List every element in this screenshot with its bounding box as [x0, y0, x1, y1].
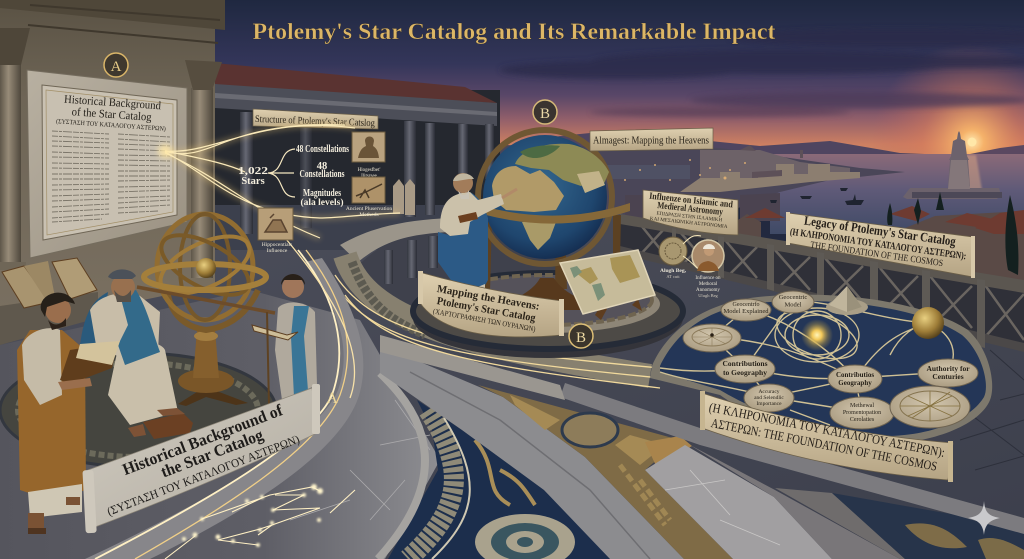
card: bust: Ilitsrsee — [361, 174, 378, 179]
medallion B bottom — [569, 324, 593, 348]
banner: mapping the heavens — [418, 271, 564, 337]
node: geocentric model explained: Model Explained — [724, 308, 769, 315]
label: A on floor: A — [326, 390, 338, 407]
node: authority for centuries: Authority for — [926, 364, 970, 373]
diagram: 1,022 stars tree: 1,022 — [238, 166, 268, 177]
diagram: 1,022 stars tree: Magnitudes — [303, 188, 341, 199]
banner: influence on islamic and medieval astronomy: ΚΑΙ ΜΕΣΑΙΩΝΙΚΗ ΑΣΤΡΟΝΟΜΙΑ — [650, 217, 728, 230]
glowing light streams from the plaque — [158, 125, 400, 238]
banner: influence on islamic and medieval astronomy: ΕΠΙΔΡΑΣΗ ΣΤΗΝ ΙΣΛΑΜΙΚΗ — [656, 212, 723, 223]
left curved curb with gold lines — [85, 232, 363, 559]
medallions: astrolabe and Ulugh Beg: Influence on — [695, 276, 721, 281]
node: contributions geography — [828, 365, 882, 393]
gold road bundle toward the legacy disc — [335, 255, 660, 388]
diagram: 1,022 stars tree: Constellations — [300, 169, 344, 180]
medallions: astrolabe and Ulugh Beg: AT cutt — [666, 274, 680, 279]
node: contributions geography: Contributios — [836, 371, 874, 379]
title: Ptolemy's Star Catalog and Its Remarkable Impact — [252, 19, 776, 44]
banner: greek legacy scroll: ΑΣΤΕΡΩΝ: THE FOUNDATION OF THE COSMOS — [710, 415, 938, 474]
floor marble plaza, bottom centre-left — [0, 290, 440, 559]
banner: influence on islamic and medieval astronomy: Medieral Astronomy — [657, 201, 724, 218]
medallions: astrolabe and Ulugh Beg — [659, 235, 724, 298]
banner: historical background scroll: Historical Background of — [120, 400, 286, 479]
background: dusk sky — [0, 0, 1024, 242]
medallion A: A — [111, 59, 122, 75]
astrolabe disc — [890, 386, 970, 428]
marble step band — [380, 345, 684, 559]
banner: greek legacy scroll — [700, 391, 953, 482]
rug mosaic around the figures — [0, 353, 276, 467]
node: accuracy and scientific importance: Importance — [756, 401, 782, 407]
banner: mapping the heavens: Ptolemy's Star Catalog — [436, 295, 537, 324]
lighthouse of Alexandria — [903, 131, 1002, 199]
globe on stand — [478, 130, 630, 310]
plaque heading: Historical Background — [64, 94, 162, 112]
panel: historical background plaque — [27, 70, 187, 258]
banner: structure of the star catalog: Structure of Ptolemy's Star Catslog — [255, 114, 375, 129]
diagram: 1,022 stars tree: Stars — [241, 176, 265, 187]
node: contributions to geography: Contributions — [722, 359, 768, 368]
terrace floor — [0, 215, 1024, 559]
network lines — [660, 301, 953, 425]
diagram: 1,022 stars tree: 48 — [317, 161, 327, 172]
banner: influence on islamic and medieval astronomy — [643, 190, 738, 235]
node: accuracy and scientific importance: and Selendlic — [754, 395, 784, 401]
node: contributions to geography: to Geography — [723, 368, 767, 377]
left stone building wall — [0, 0, 225, 330]
node: medieval promentopation: Promentopation — [843, 410, 881, 416]
sun — [801, 319, 833, 351]
node: geocentric model explained — [721, 299, 771, 321]
panel: legacy disc with network — [650, 286, 992, 443]
figure: Ptolemy pointing at the globe — [438, 173, 517, 308]
world map on easel — [560, 250, 655, 320]
diagram: 1,022 stars tree: 48 Constellations — [296, 144, 349, 155]
node: authority for centuries: Centuries — [932, 372, 964, 381]
figure: standing scholar with book — [17, 293, 120, 534]
armillary sphere on stand — [144, 214, 266, 406]
right column — [185, 60, 222, 278]
plaque body text lines — [52, 131, 170, 222]
marble steps and curbs right — [380, 335, 1024, 559]
medallions: astrolabe and Ulugh Beg: Alugh Beg, — [660, 268, 687, 274]
card: hipparchus influence: Hippocentials — [262, 242, 292, 248]
diagram: 1,022 stars tree: (ala levels) — [300, 197, 344, 208]
card: observation methods: Ancient Pluservation — [346, 206, 392, 212]
banner: legacy of star catalog: Legacy of Ptolemy's Star Catalog — [803, 213, 957, 249]
figure: child holding book — [252, 274, 317, 406]
right foreground rooftops and cypress trees — [735, 192, 1024, 306]
node: medieval promentopation: Cerolaties — [850, 417, 875, 423]
pyramid marker — [826, 286, 868, 315]
banner: legacy of star catalog: (Η ΚΛΗΡΟΝΟΜΙΑ ΤΟΥ ΚΑΤΑΛΟΓΟΥ ΑΣΤΕΡΩΝ): — [789, 227, 967, 262]
node: contributions geography: Geography — [838, 379, 872, 387]
banner: almagest: Almagest: Mapping the Heavens — [593, 136, 709, 146]
plaque heading: of the Star Catalog — [71, 106, 152, 124]
figure: seated astronomer — [80, 269, 275, 439]
node: medieval promentopation — [830, 397, 894, 429]
card: observation methods — [346, 177, 392, 218]
node: accuracy and scientific importance: Accuracy — [758, 389, 780, 395]
gold mosaic band — [478, 385, 733, 559]
node: medieval promentopation: Methewal — [850, 403, 874, 409]
banner: influence on islamic and medieval astronomy: Influenze on Islamic and — [649, 192, 734, 210]
node: geocentric model: Model — [785, 302, 802, 308]
card: hipparchus influence: Influence — [267, 247, 288, 254]
node: contributions to geography — [715, 355, 775, 383]
medallions: astrolabe and Ulugh Beg: Annomomy — [696, 288, 720, 293]
blue mosaic band with spiral — [378, 373, 612, 559]
card: bust — [352, 132, 385, 179]
constellation drawn in gold on the floor — [165, 484, 355, 559]
banner: historical background scroll: (ΣΥΣΤΑΣΗ ΤΟΥ ΚΑΤΑΛΟΓΟΥ ΑΣΤΕΡΩΝ) — [105, 432, 301, 519]
banner: almagest — [590, 128, 713, 151]
banner: legacy of star catalog: THE FOUNDATION OF THE COSMOS — [810, 241, 944, 269]
medallion B top: B — [540, 106, 550, 122]
medallions: astrolabe and Ulugh Beg: Ulugh Beg — [698, 293, 719, 298]
background: mountains, harbour and city — [490, 130, 1024, 234]
curved colonnade ledge around the globe dais — [340, 218, 560, 345]
node: geocentric model — [772, 291, 814, 313]
medallions: astrolabe and Ulugh Beg: Methoral — [699, 282, 718, 287]
banner: legacy of star catalog — [786, 211, 975, 278]
icon: four-point sparkle — [968, 501, 1000, 535]
stone tiles at lower right — [945, 350, 1024, 470]
banner: historical background scroll: the Star Catalog — [158, 425, 266, 481]
banner: mapping the heavens: Mapping the Heavens: — [436, 283, 540, 313]
node: star chart disc — [683, 324, 741, 352]
node: authority for centuries — [918, 359, 978, 387]
medallion B bottom: B — [576, 330, 586, 346]
gold sphere — [912, 307, 944, 339]
colonnaded stoa building — [215, 63, 500, 250]
plaque heading: (ΣΥΣΤΑΣΗ ΤΟΥ ΚΑΤΑΛΟΓΟΥ ΑΣΤΕΡΩΝ) — [56, 118, 166, 133]
banner: structure of the star catalog — [253, 109, 378, 129]
diagram: 1,022 stars tree — [238, 144, 349, 208]
node: geocentric model explained: Geocentrfo — [732, 301, 760, 308]
plaque heading — [56, 93, 168, 133]
node: accuracy and scientific importance — [744, 384, 794, 412]
node: geocentric model: Geocentric — [779, 294, 807, 301]
card: observation methods: Methods — [359, 212, 379, 218]
banner: greek legacy scroll: (Η ΚΛΗΡΟΝΟΜΙΑ ΤΟΥ ΚΑΤΑΛΟΓΟΥ ΑΣΤΕΡΩΝ): — [708, 399, 946, 460]
balustrade — [620, 214, 1024, 352]
card: hipparchus influence — [258, 208, 293, 254]
banner: mapping the heavens: (ΧΑΡΤΟΓΡΑΦΗΣΗ ΤΩΝ ΟΥΡΑΝΩΝ) — [432, 307, 537, 334]
medallion A — [104, 53, 128, 77]
open books on stone shelf — [0, 258, 98, 345]
globe dais — [413, 273, 683, 358]
medallion B top — [533, 100, 557, 124]
left column — [0, 28, 30, 270]
card: bust: Hlogesfbet' — [358, 168, 381, 173]
banner: historical background scroll — [82, 384, 320, 533]
